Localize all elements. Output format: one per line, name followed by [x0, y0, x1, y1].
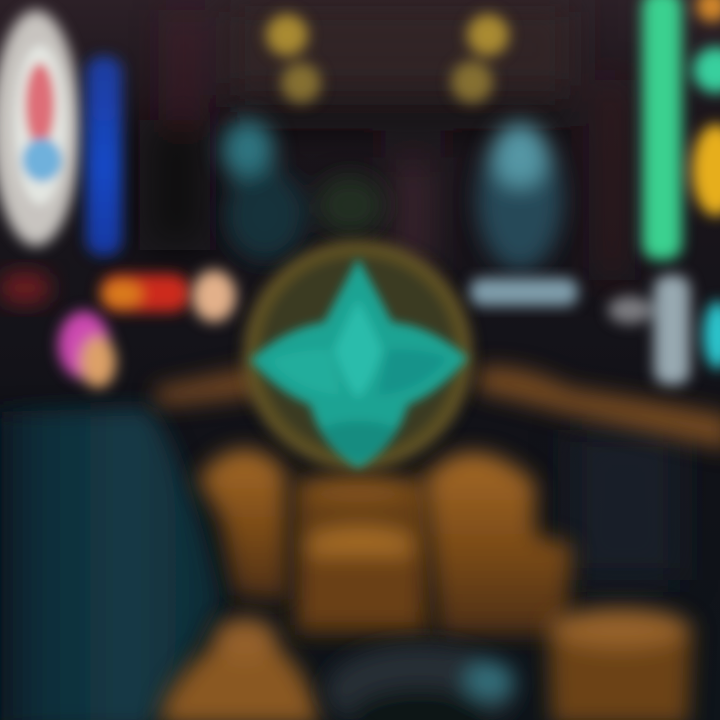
coin stacks [160, 449, 692, 720]
central coin [250, 247, 468, 468]
left sign [0, 10, 122, 256]
right neon signs [642, 0, 720, 260]
bottom left stack [160, 618, 320, 720]
blue bar [86, 56, 122, 256]
coin ring [250, 247, 466, 463]
sign body [0, 10, 80, 246]
teal star emblem [250, 258, 468, 468]
sign inner glyph [14, 45, 66, 205]
red neon lights [0, 270, 236, 322]
right stack [425, 452, 572, 635]
pink light [58, 311, 116, 388]
light bar [470, 278, 578, 306]
teal domes [222, 120, 562, 270]
bottom right stack [548, 608, 692, 720]
dark bottom ellipse [325, 644, 515, 720]
right white and cyan lights [608, 275, 720, 385]
background pillars [140, 0, 680, 580]
bottom left teal panel [0, 408, 222, 720]
left stack [198, 449, 288, 600]
centre stack [295, 474, 430, 635]
yellow lights [266, 14, 509, 103]
branches [155, 366, 720, 450]
